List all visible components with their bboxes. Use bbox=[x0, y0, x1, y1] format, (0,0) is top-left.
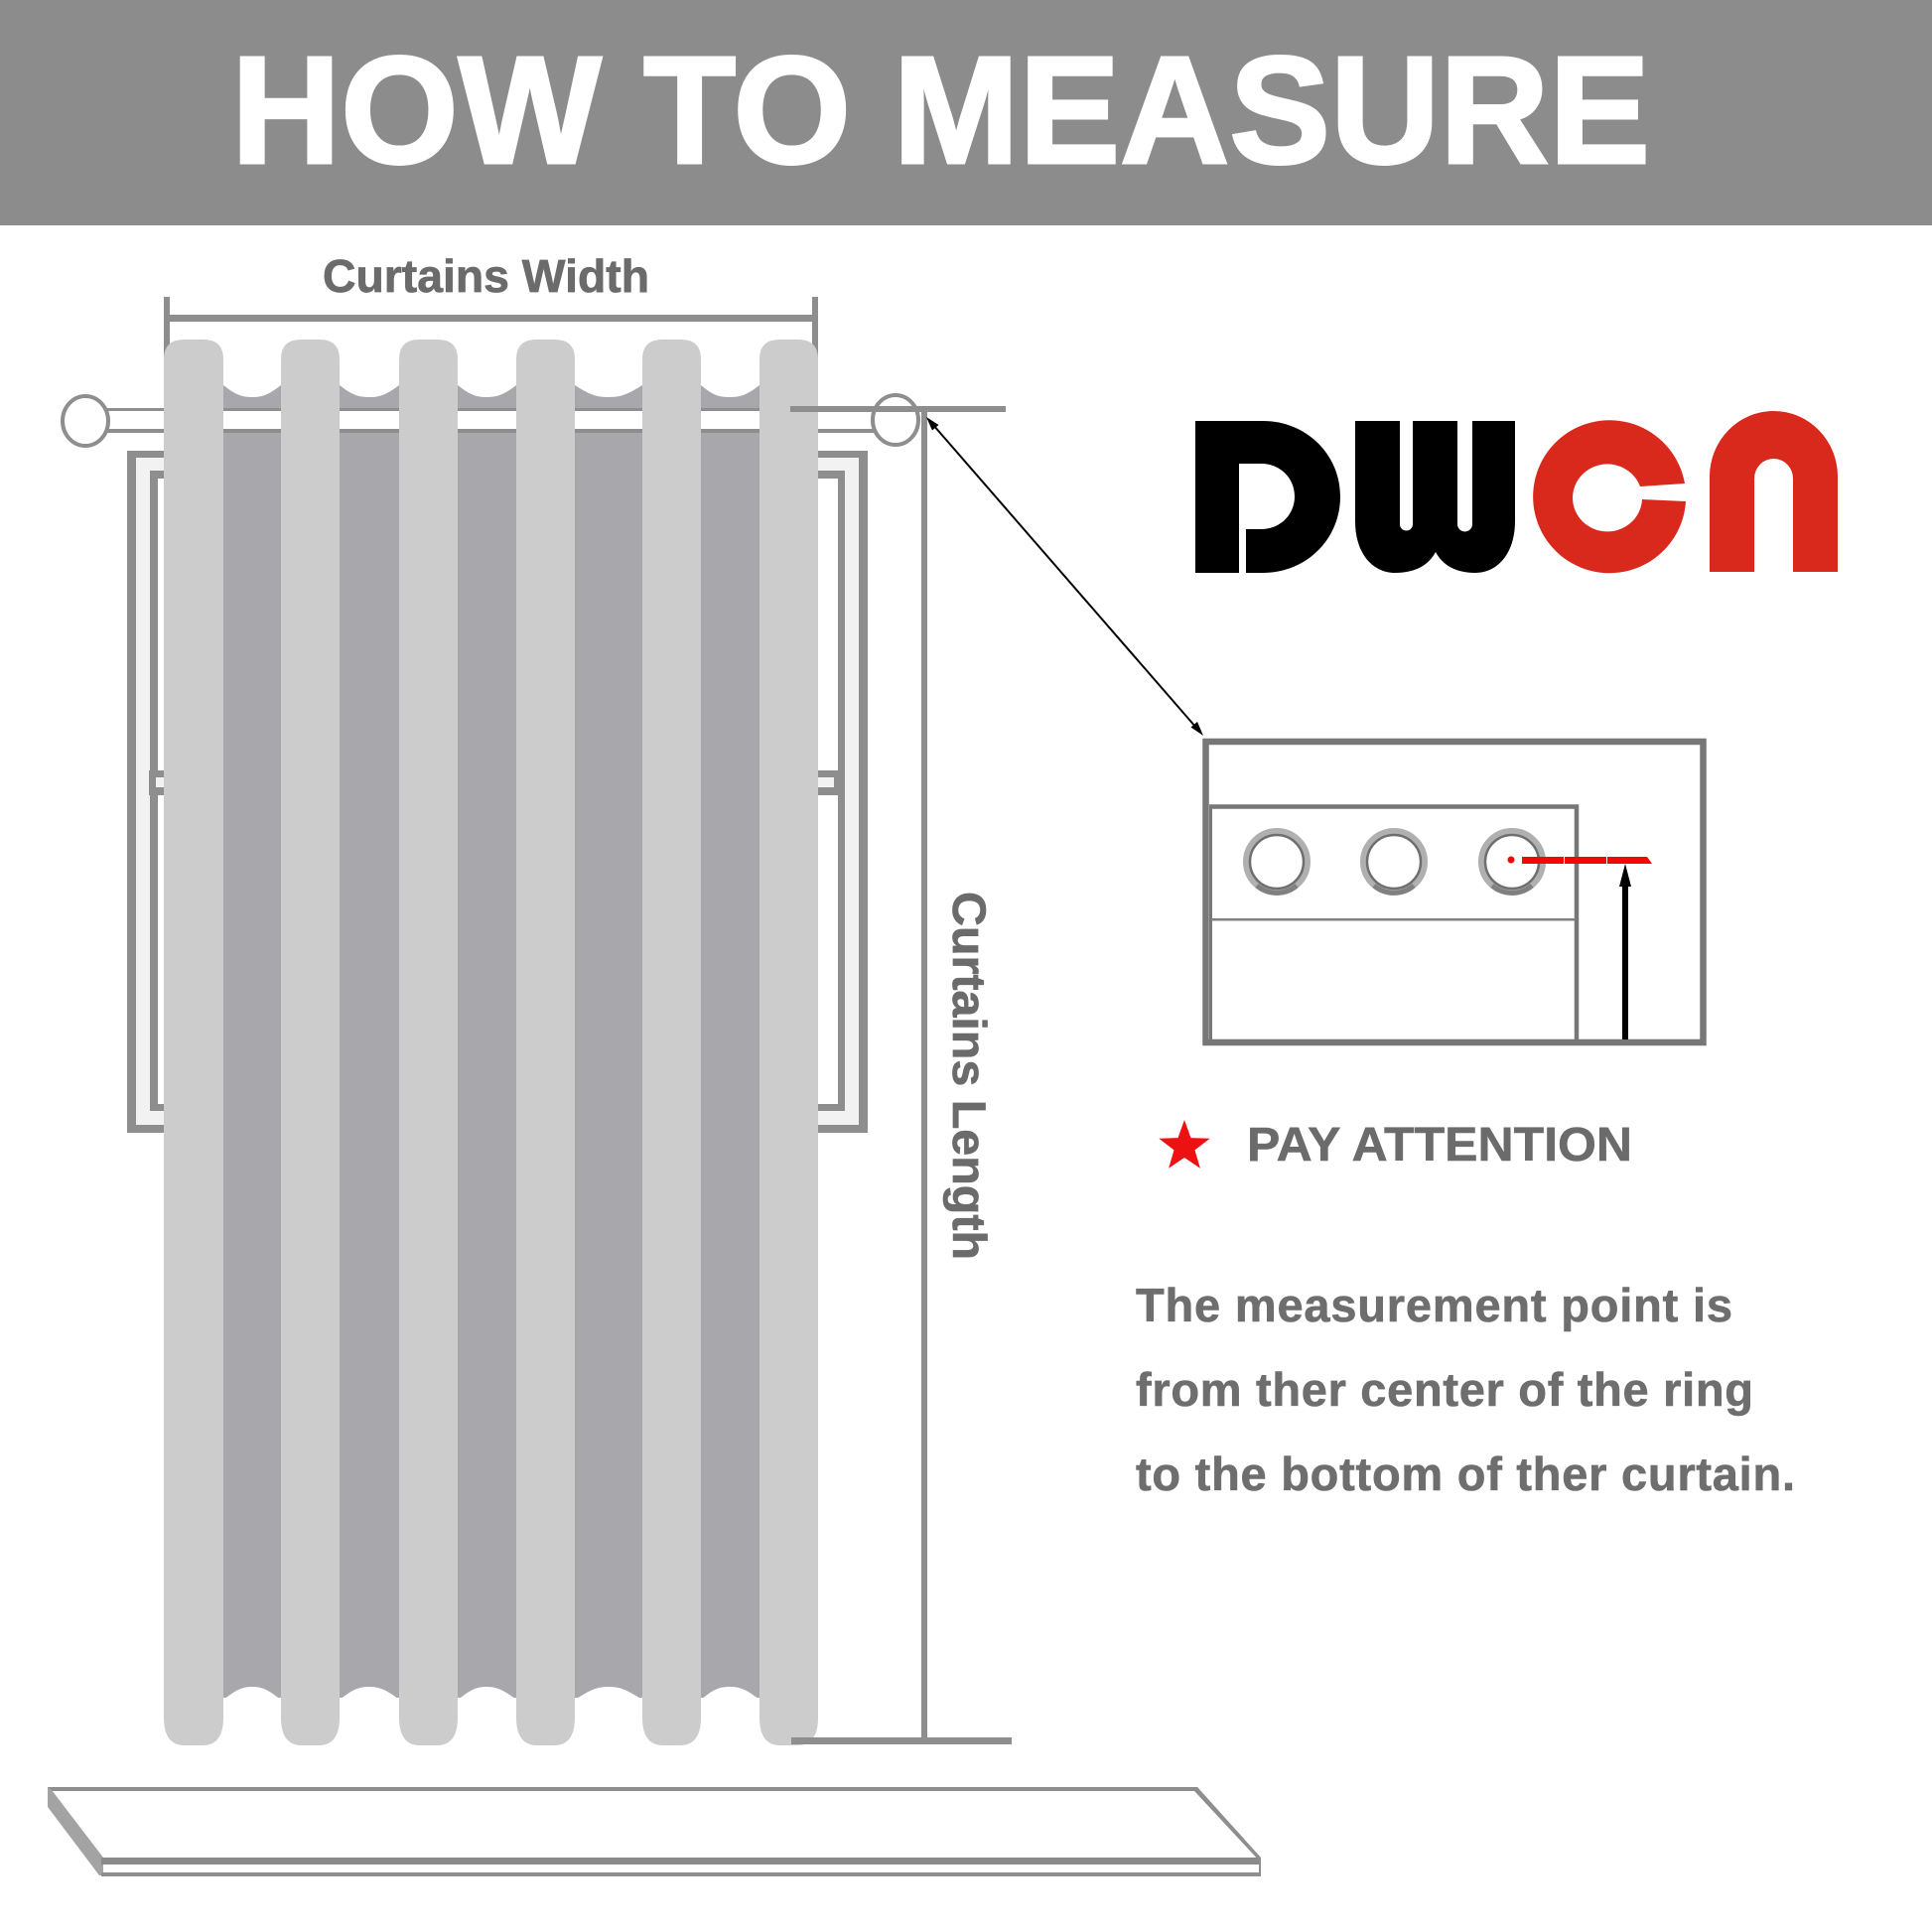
rod finial right bbox=[873, 395, 918, 445]
icon: red star bbox=[1159, 1120, 1210, 1169]
rod finial left bbox=[63, 396, 108, 446]
floor front edge bbox=[101, 1858, 1261, 1864]
logo letter D bbox=[1195, 421, 1340, 573]
floor left side face bbox=[48, 1787, 103, 1875]
floor platform bbox=[48, 1787, 1261, 1876]
title: HOW TO MEASURE bbox=[231, 25, 1650, 196]
curtain rod bbox=[63, 395, 918, 446]
diagonal double-headed arrow bbox=[926, 417, 1203, 736]
grommet ring 1 bbox=[1247, 832, 1307, 893]
black upward arrow bbox=[1619, 864, 1631, 1039]
header banner bbox=[0, 0, 1932, 225]
grommet ring 3 bbox=[1482, 832, 1542, 893]
curtain raised pleats bbox=[164, 340, 818, 1745]
pay attention heading: PAY ATTENTION bbox=[1247, 1119, 1632, 1172]
curtain bottom scallops bbox=[223, 1687, 759, 1713]
red measurement line bbox=[1507, 856, 1652, 864]
curtain panel bbox=[164, 340, 818, 1745]
length dimension bracket bbox=[790, 406, 1012, 1744]
explanation paragraph: to the bottom of ther curtain. bbox=[1136, 1448, 1795, 1500]
logo letter C bbox=[1533, 420, 1686, 573]
curtain recessed folds bbox=[223, 385, 759, 1698]
grommet detail diagram bbox=[1205, 742, 1704, 1042]
grommet ring 2 bbox=[1364, 832, 1424, 893]
window frame bbox=[127, 451, 868, 1133]
explanation paragraph: from ther center of the ring bbox=[1136, 1363, 1753, 1416]
length dimension label: Curtains Length bbox=[943, 892, 996, 1260]
width dimension bracket bbox=[164, 297, 818, 360]
logo letter W bbox=[1355, 421, 1515, 573]
width dimension label: Curtains Width bbox=[323, 250, 649, 302]
explanation paragraph: The measurement point is bbox=[1136, 1279, 1732, 1331]
logo bbox=[1195, 411, 1838, 573]
explanation paragraph bbox=[1136, 1279, 1795, 1500]
logo letter N bbox=[1710, 411, 1838, 572]
